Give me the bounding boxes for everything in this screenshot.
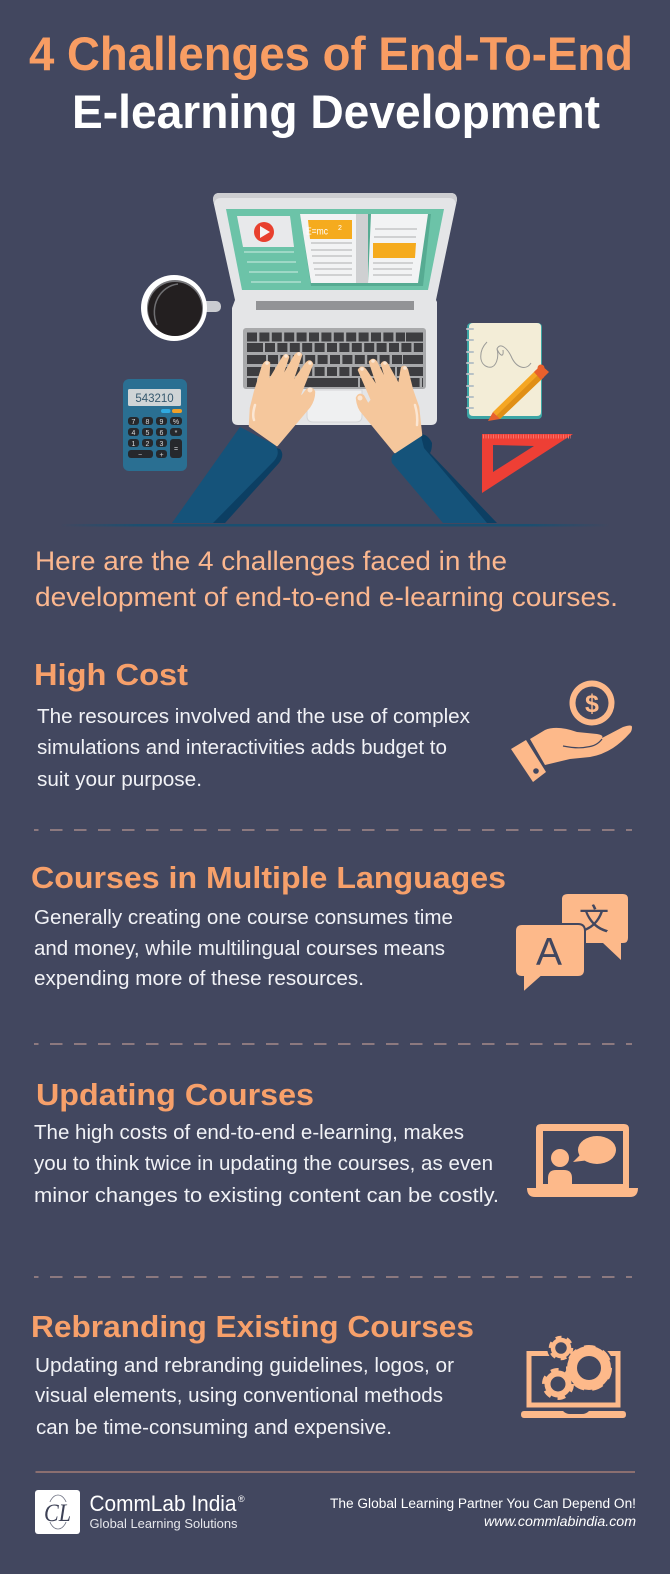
title: 4 Challenges of End-To-End [29, 27, 633, 80]
illustration: laptop on desk [60, 193, 610, 526]
icon: hand with coin [511, 680, 632, 782]
text block: updating courses [34, 1122, 499, 1207]
icon: calculator: 1 [132, 441, 136, 448]
logo: CommLab India: CommLab India [90, 1491, 237, 1516]
title [29, 27, 633, 138]
icon: laptop with gears [521, 1334, 626, 1418]
heading: updating courses: Updating Courses [36, 1077, 314, 1112]
icon: calculator: − [138, 452, 142, 459]
tagline: www.commlabindia.com [484, 1514, 636, 1529]
icon: calculator: + [159, 452, 164, 459]
icon: left arm and hand [172, 352, 314, 523]
icon: notebook and pencil [467, 323, 549, 421]
text block: multiple languages: and money, while multilingual courses means [34, 938, 445, 960]
icon: coffee cup [141, 275, 221, 341]
icon: calculator: = [174, 446, 178, 453]
icon: hand with coin: $ [585, 690, 599, 718]
icon: calculator: 6 [160, 430, 164, 437]
icon: laptop: E=mc [306, 226, 328, 238]
icon: translation bubbles [515, 894, 628, 993]
icon: calculator: 8 [146, 419, 150, 426]
icon: calculator: 3 [160, 441, 164, 448]
icon: set square [482, 434, 573, 493]
text block: high cost: The resources involved and the use of complex [37, 706, 470, 728]
intro text [35, 546, 618, 612]
logo: CommLab India: ® [238, 1494, 245, 1504]
panel: rebranding existing courses [31, 1309, 626, 1439]
text block: high cost: simulations and interactivities adds budget to [37, 737, 447, 759]
tagline [330, 1496, 636, 1529]
panel: updating courses [34, 1077, 638, 1207]
panel: high cost [34, 657, 632, 791]
heading: high cost: High Cost [34, 657, 188, 692]
text block: rebranding: Updating and rebranding guidelines, logos, or [35, 1355, 454, 1377]
text block: updating courses: you to think twice in updating the courses, as even [34, 1153, 493, 1175]
intro text: development of end-to-end e-learning courses. [35, 582, 618, 612]
text block: rebranding: can be time-consuming and expensive. [36, 1417, 392, 1439]
footer [35, 1471, 636, 1534]
heading: rebranding: Rebranding Existing Courses [31, 1309, 474, 1344]
heading: multiple languages: Courses in Multiple Languages [31, 860, 506, 895]
intro text: Here are the 4 challenges faced in the [35, 546, 507, 576]
icon: calculator [123, 379, 187, 471]
icon: calculator: * [175, 430, 178, 437]
icon: right arm and hand [357, 359, 497, 523]
text block: high cost [37, 706, 470, 791]
text block: rebranding: visual elements, using conventional methods [35, 1385, 443, 1407]
icon: translation bubbles: 文 [579, 895, 609, 939]
logo: CommLab India: Global Learning Solutions [90, 1516, 238, 1531]
text block: multiple languages: expending more of these resources. [34, 968, 364, 990]
icon: laptop [213, 193, 457, 425]
text block: high cost: suit your purpose. [37, 769, 202, 791]
icon: calculator: 4 [132, 430, 136, 437]
icon: calculator: 5 [146, 430, 150, 437]
panel: courses in multiple languages [31, 860, 628, 993]
icon: translation bubbles: A [536, 931, 562, 974]
text block: multiple languages: Generally creating one course consumes time [34, 907, 453, 929]
text block: updating courses: The high costs of end-to-end e-learning, makes [34, 1122, 464, 1144]
icon: calculator: 2 [146, 441, 150, 448]
tagline: The Global Learning Partner You Can Depend On! [330, 1496, 636, 1511]
icon: laptop: 2 [338, 225, 342, 232]
text block: multiple languages [34, 907, 453, 990]
text block: rebranding [35, 1355, 454, 1439]
icon: calculator: % [173, 419, 179, 426]
icon: calculator: 7 [132, 419, 136, 426]
text block: updating courses: minor changes to existing content can be costly. [34, 1185, 499, 1207]
icon: calculator: 543210 [135, 393, 174, 405]
logo: CommLab India: CL [44, 1500, 71, 1527]
icon: laptop with presenter [527, 1124, 638, 1197]
icon: calculator: 9 [160, 419, 164, 426]
logo: CommLab India [35, 1490, 245, 1534]
title: E-learning Development [72, 85, 600, 138]
